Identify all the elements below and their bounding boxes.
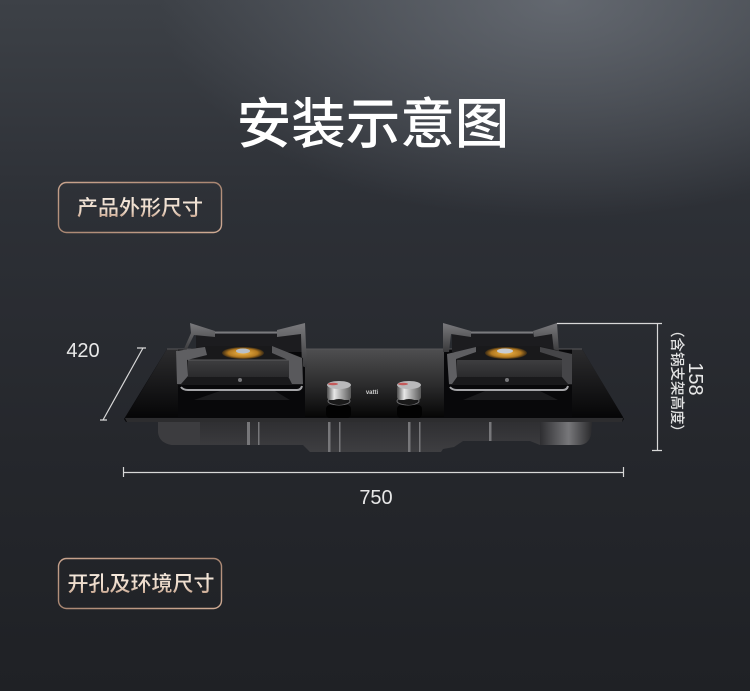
- dimension: height 158: 158: [684, 362, 706, 396]
- cooktop product image: [124, 323, 624, 452]
- label: product dimensions: 产品外形尺寸: [77, 197, 203, 220]
- right knob: [397, 381, 422, 418]
- label: cut-out and environment dimensions: 开孔及环境尺寸: [68, 573, 214, 596]
- right burner: [443, 323, 572, 400]
- dimension: depth 420: [66, 340, 146, 420]
- left burner: [176, 323, 307, 400]
- left knob: [326, 381, 351, 418]
- dimension: width 750: 750: [359, 487, 393, 509]
- glass plate: [124, 349, 624, 422]
- dimension: width 750: [123, 467, 624, 509]
- label: product dimensions: [58, 182, 222, 232]
- dimension: depth 420: 420: [66, 340, 100, 362]
- title: 安装示意图: [237, 94, 509, 155]
- dimension: height 158: （含锅支架高度）: [668, 323, 686, 439]
- dimension: height 158: [557, 323, 706, 451]
- lower pan: [158, 420, 592, 452]
- brand logo: vatti: [366, 390, 378, 396]
- label: cut-out and environment dimensions: [58, 558, 222, 608]
